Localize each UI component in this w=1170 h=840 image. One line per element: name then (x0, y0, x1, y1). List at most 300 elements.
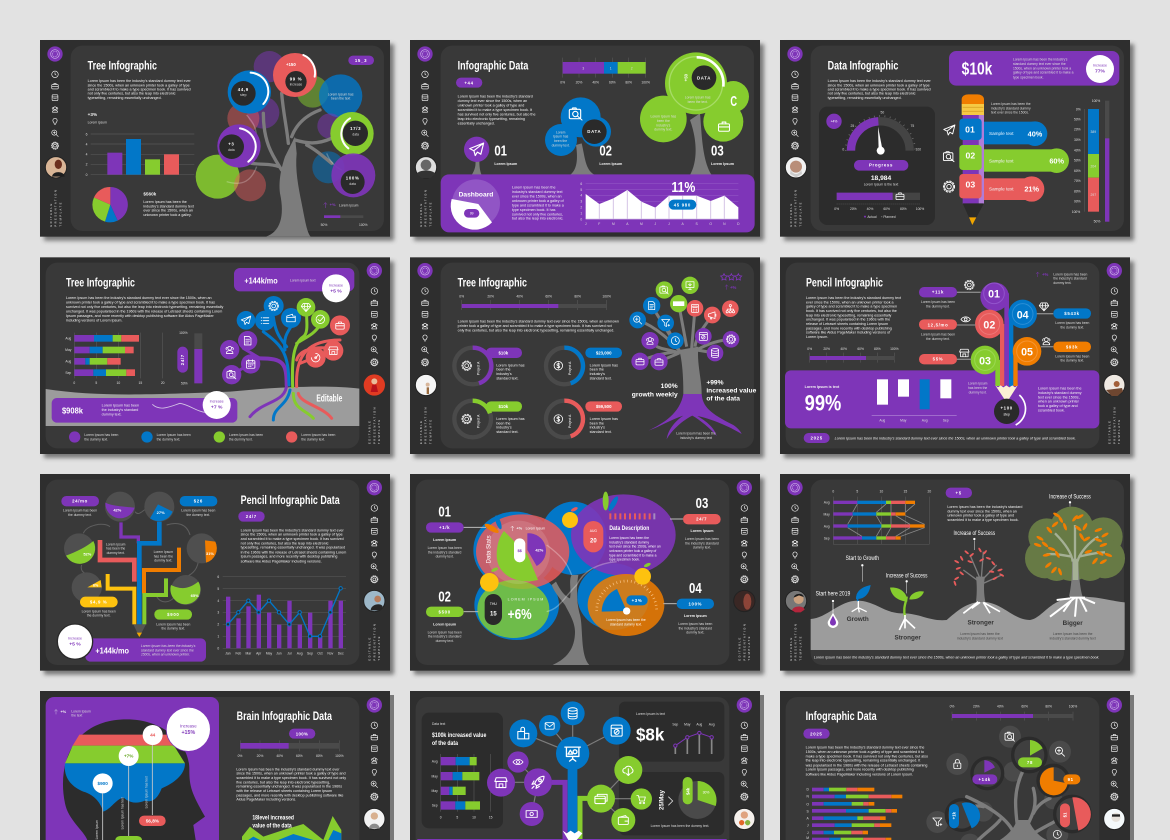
area chart: 4 (580, 194, 582, 198)
tree 02: 02 (599, 144, 612, 160)
paragraph: with the release of Letraset sheets containing Lorem Ipsum (236, 789, 332, 793)
top panel $10k: $10k (962, 59, 993, 79)
node icons (960, 280, 1050, 357)
area chart: N (723, 222, 726, 226)
green canopy (477, 580, 549, 638)
pie: purple (972, 758, 1003, 789)
dashboard text: Lorem Ipsum has been the (512, 186, 555, 190)
area chart: 3 (580, 200, 582, 204)
green canopy content: LOREM IPSUM (508, 598, 544, 602)
paragraph: make a type specimen book. It has survived not only five centuries, but also (806, 754, 928, 758)
gauge panel: +4% (831, 120, 837, 124)
paragraph: Lorem Ipsum has been the industry's standard dummy text ever (241, 528, 345, 532)
top panel $10k: 1500s, when an unknown printer took a (1013, 66, 1071, 70)
callout 01: 01 (438, 505, 451, 521)
rail label: PRESENTATION (1112, 406, 1116, 444)
growth note (1036, 272, 1088, 285)
pill 24/mo: Lorem Ipsum has been (63, 509, 97, 513)
blue connectors (523, 713, 617, 753)
progress bar: 0% (950, 705, 954, 709)
increase badge (166, 707, 210, 751)
paragraph: was popularised in the 1960s with the release of Letraset sheets containing (806, 763, 927, 767)
bottom panel $908k: dummy text. (102, 412, 122, 416)
project donut blue: been the (590, 368, 604, 372)
paragraph: and scrambled it to make a type specimen book. It has survived (828, 88, 931, 92)
combo chart: Dec (338, 651, 344, 655)
slide 9: growth stages (780, 474, 1134, 675)
rail label: PRESENTATION (794, 189, 798, 227)
area chart: 2 (580, 206, 582, 210)
gauge panel: 25 (850, 124, 854, 128)
rail label: TEMPLATE (798, 635, 802, 661)
paragraph (806, 745, 928, 776)
pie: green (1013, 738, 1046, 772)
legend: Lorem Ipsum has been (229, 433, 263, 437)
rail label (1108, 406, 1121, 444)
callout 01: +1/k (439, 525, 450, 530)
dashboard gauge: Dashboard (459, 191, 493, 198)
pencil pipes (100, 522, 179, 624)
pill $26: the dummy text. (186, 513, 210, 517)
tree 03: Lorem Ipsum has (685, 96, 711, 100)
pill $26: Lorem Ipsum has been (181, 509, 215, 513)
vertical stacked bar: 40% (1074, 148, 1081, 152)
top right panel: Aug (709, 723, 715, 727)
stacked bar chart: 15 (138, 381, 142, 385)
blue tree icons (629, 297, 684, 349)
head silhouette (63, 719, 205, 840)
combo chart: Mar (245, 651, 252, 655)
vertical progress (179, 331, 202, 386)
project donut green (454, 401, 525, 437)
circle 44 (143, 725, 163, 745)
mini progress bar: 100% (359, 223, 368, 227)
paragraph: and scrambled it to make a type specimen book. It has survived (88, 88, 191, 92)
stacked bar: 80% (625, 81, 632, 85)
pie: green: 78 (1027, 760, 1033, 765)
left data panel: May (432, 789, 438, 793)
paragraph: Lorem Ipsum passages, and more recently with desktop publishing (806, 768, 914, 772)
leader lines (95, 745, 152, 840)
combo chart: 3 (217, 611, 219, 615)
avatar: woman with fruit (734, 808, 755, 830)
paragraph: the leap into electronic typesetting, remaining essentially unchanged. It (806, 759, 920, 763)
pencil text: text ever since the 1500s. (991, 111, 1029, 115)
top panel $10k: type specimen book. (1013, 75, 1044, 79)
avatar: woman in red (364, 374, 385, 396)
bar chart: 2 (86, 163, 88, 167)
slide 2: Infographic Data (410, 40, 764, 241)
ribbon 03: 03 (966, 180, 975, 190)
rail label: PRESENTATION (424, 189, 428, 227)
stacked bar: 20% (576, 81, 582, 85)
stat +3%: +3% (88, 112, 98, 117)
stage: big tree: Bigger (1063, 620, 1083, 627)
project donut purple (454, 348, 525, 384)
tree 03: Lorem Ipsum (711, 162, 735, 166)
pill yellow: $4,9 % (90, 599, 107, 604)
slide 1: Tree Infographic (40, 40, 394, 241)
callout 03: 24/7 (696, 517, 707, 522)
ring: red 99% (273, 53, 317, 97)
tree 03: Lorem Ipsum has (650, 115, 677, 119)
green canopy content: THU (490, 602, 497, 606)
area chart: J (668, 222, 670, 226)
stacked bar chart: May (65, 348, 72, 352)
rail label: PRESENTATION (424, 406, 428, 444)
navigation rail (367, 480, 382, 583)
rail label (49, 189, 62, 227)
rail label: TEMPLATE (377, 635, 381, 661)
ring: purple 100%: 100% (346, 176, 360, 181)
paragraph: Lorem Ipsum has been the industry's standard (458, 94, 533, 98)
stage: red tree: industry's standard dummy text (957, 636, 1003, 640)
panel caption right: industry's standard dummy (1038, 391, 1082, 395)
left pills: Lorem Ipsum has been (921, 300, 955, 304)
panel caption left (968, 382, 988, 394)
paragraph: and scrambled it to make a type specimen book. It has survived (241, 537, 344, 541)
avatar: businesswoman (364, 808, 385, 830)
combo chart: 2 (217, 623, 219, 627)
mini progress bar (321, 215, 368, 227)
purple canopy content (583, 513, 661, 562)
paragraph: Lorem Ipsum. (806, 335, 828, 339)
project donut purple: Lorem Ipsum has (496, 363, 525, 367)
avatar: woman (45, 157, 67, 178)
paragraph: dummy text ever since the 1500s, when an (458, 99, 527, 103)
hanging bar chart: Sep (943, 418, 949, 422)
rail label: PRESENTATION (372, 623, 376, 661)
bottom panel $908k: +7 % (211, 405, 223, 411)
pill 24/7: 24/7 (246, 514, 257, 519)
pill 45 980: 45 980 (674, 202, 691, 207)
gauge in orange canopy: +3% (632, 598, 642, 603)
circle +7% (119, 746, 139, 766)
growth note: Lorem Ipsum (71, 709, 91, 713)
dashboard text: unknown printer took a galley of (512, 199, 565, 203)
chart heading: 18level increased (252, 815, 294, 821)
gauge panel: 18,984 (871, 175, 891, 182)
callout 04: dummy text. (686, 631, 704, 635)
tree stat left: growth weekly (632, 391, 678, 398)
callout 04: the industry's standard (679, 626, 712, 630)
pencil text: Lorem Ipsum has been the (991, 102, 1031, 106)
rail label: EDITABLE (1108, 420, 1112, 444)
progress bar: 0% (238, 754, 242, 758)
callout 02: dummy text. (436, 639, 454, 643)
purple head panel (46, 697, 219, 840)
rail label: TEMPLATE (428, 418, 432, 444)
slide 7: Pencil Infographic Data (40, 474, 394, 675)
tree (965, 770, 1068, 840)
pie caption: ever since the 1500s, when an (143, 209, 193, 213)
purple canopy content: text ever since the 1500s, when an (609, 545, 661, 549)
stage: sprout: Growth (847, 616, 869, 623)
ribbon 02 (959, 145, 1069, 173)
pill 15_3: 15_3 (355, 58, 367, 63)
rail label: EDITABLE (789, 202, 793, 227)
paragraph: scrambled it to make a type specimen book. It (458, 108, 532, 112)
pie: yellow (72, 572, 102, 602)
pill green: $900 (167, 612, 179, 617)
panel caption right: when an unknown printer (1038, 400, 1080, 404)
stage: seed: Start here 2019 (816, 592, 851, 598)
pill green (154, 609, 192, 631)
top panel +144k/mo: Lorem ipsum text (290, 278, 316, 282)
tree 03: +50 (683, 73, 688, 81)
ring: blue 44,9: 44,9 (238, 87, 249, 92)
project donut red: been the (590, 421, 604, 425)
paragraph: since the 1500s, when an unknown printer took a galley of type (88, 83, 190, 87)
project donut green: Project A (476, 414, 480, 428)
circle $900 (93, 773, 113, 793)
bar chart: 4 (86, 153, 88, 157)
blue stem (568, 767, 577, 840)
title: Brain Infographic Data (237, 709, 332, 723)
tree 03: been the text. (688, 100, 708, 104)
pipe captions: Lorem Ipsum (106, 542, 126, 546)
tree trunk and branches (638, 304, 731, 394)
title: Pencil Infographic (806, 276, 883, 290)
tree trunk (227, 93, 342, 237)
hanging bar chart: Aug (879, 418, 885, 422)
pie in red canopy: Data Stats (487, 535, 493, 563)
area chart (580, 182, 740, 226)
callout 04: 04 (689, 581, 702, 597)
paragraph (458, 94, 536, 125)
project donut red: industry's (590, 426, 605, 430)
combo chart: Nov (327, 651, 334, 655)
purple canopy content: 20 (590, 539, 597, 545)
paragraph: leap into electronic typesetting, remaining essentially (806, 313, 892, 317)
ribbon 01: 01 (965, 124, 975, 134)
stage: red tree: Increase of Success (953, 531, 995, 537)
callout 02 (426, 589, 478, 643)
project donut purple: industry's (496, 372, 512, 376)
purple panel (785, 370, 1099, 428)
progress bar: 80% (574, 295, 581, 299)
paragraph: software like Aldus PageMaker including versions of Lorem Ipsum. (806, 772, 913, 776)
paragraph: Lorem Ipsum has been the industry's standard dummy text ever (828, 79, 932, 83)
pill green: the dummy text. (161, 627, 185, 631)
ring: red 99%: increase (290, 83, 302, 87)
circle $900: $900 (97, 781, 108, 786)
pill green (115, 836, 142, 840)
paragraph: including versions of Lorem Ipsum. (66, 318, 122, 322)
vertical stacked bar: 50% (1074, 159, 1081, 163)
purple canopy (571, 494, 676, 576)
tree 02: DATA (587, 129, 602, 134)
paragraph (947, 505, 1022, 522)
rail label: TEMPLATE (58, 201, 62, 227)
purple icons (220, 331, 260, 384)
progress bar: 20% (973, 705, 980, 709)
stage: red tree: Stronger (967, 619, 994, 626)
pill 2025 (803, 729, 830, 739)
chart heading (252, 815, 294, 829)
increase badge: +15% (181, 730, 195, 736)
progress bar: 100% (602, 295, 611, 299)
vertical stacked bar (1072, 107, 1099, 214)
ring: purple 100% (331, 153, 375, 197)
left data panel: 5 (456, 816, 458, 820)
slide 5: Tree Infographic with projects (410, 257, 764, 458)
tree trunk (552, 575, 589, 665)
paragraph: since the 1500s, when an unknown printer took a galley of type (828, 83, 930, 87)
tree 02 (545, 97, 623, 175)
callout 01 (426, 505, 486, 559)
left pills: the dummy text. (926, 337, 950, 341)
panel caption right: Lorem Ipsum has been the (1038, 387, 1081, 391)
floating icons (933, 732, 1064, 838)
top panel $10k: 77% (1095, 69, 1106, 75)
rail label: EDITABLE (419, 420, 423, 444)
vertical progress: 100% (1092, 99, 1100, 103)
ribbon 01: 40% (1028, 129, 1043, 138)
callout 03: 03 (696, 496, 708, 512)
stacked bar chart: O (806, 802, 809, 806)
combo chart: 5 (217, 587, 219, 591)
pie: orange (1038, 765, 1080, 796)
progress bar: 20% (823, 347, 830, 351)
root caption: Lorem Ipsum has been the (676, 431, 716, 435)
tree 01 (464, 137, 518, 175)
ground (46, 387, 359, 426)
bottom panel $908k: $908k (62, 405, 83, 415)
purple canopy content: AUG (590, 529, 597, 533)
pie: blue (144, 492, 174, 522)
project donut red (546, 401, 622, 437)
area chart: D (737, 222, 740, 226)
purple canopy content: Data Description (609, 525, 649, 532)
paragraph: Lorem Ipsum has been the industry's standard dummy text ever (236, 767, 340, 771)
ribbon 01 (959, 119, 1047, 146)
paragraph (66, 296, 223, 322)
dashboard panel (441, 174, 755, 232)
node 03 (971, 346, 999, 374)
navigation rail (417, 263, 433, 366)
tree 03 (640, 52, 749, 175)
orange canopy (588, 574, 664, 636)
area chart: F (598, 222, 600, 226)
callout 02: the industry's standard (428, 635, 462, 639)
tree 03: C (730, 94, 737, 110)
gauge panel: 100 (916, 148, 921, 152)
ring: red 99%: +150 (286, 62, 296, 67)
growth indicator: +% (730, 285, 737, 290)
navigation rail (737, 480, 752, 583)
paragraph: unknown printer took a galley of type and (458, 104, 524, 108)
node 02: 02 (983, 319, 995, 331)
panel caption right: scrambled book. (1038, 408, 1065, 412)
project donut purple: standard text. (496, 376, 518, 380)
right pills: Lorem Ipsum has been (1055, 354, 1089, 358)
combo chart: Jan (225, 651, 231, 655)
99% stat: Lorem Ipsum is text (805, 385, 840, 389)
legend: Lorem Ipsum has been (301, 433, 336, 437)
paragraph: since the 1500s, when an unknown printer took a galley of type (241, 533, 343, 537)
ribbon 03 (959, 174, 1044, 202)
area chart: 6 (580, 182, 582, 186)
left pills: 55% (933, 357, 943, 362)
stacked bar chart (806, 788, 902, 840)
pipe captions (106, 542, 173, 563)
pill 24/mo: 24/mo (72, 499, 88, 504)
side icons (943, 125, 955, 192)
root caption: industry's dummy text (680, 436, 712, 440)
combo chart: 0 (217, 647, 219, 651)
legend: Lorem Ipsum has been (157, 433, 191, 437)
ribbon 03: 21% (1024, 185, 1039, 194)
vertical stacked bar: 60% (1074, 169, 1081, 173)
growth indicator (324, 202, 359, 208)
stage: big tree: industry's standard dummy text (1050, 636, 1096, 640)
growth note: the industry's standard (1053, 277, 1087, 281)
callout 01: dummy text. (436, 555, 454, 559)
project donut red: $59,500 (596, 404, 612, 409)
pie: blue (946, 800, 980, 830)
paragraph: Ipsum passages, and more recently with desktop publishing software like Aldus PageMaker (66, 314, 215, 318)
left pills: Lorem Ipsum has been (921, 333, 955, 337)
pill 100% (289, 729, 315, 739)
slide 3: Data Infographic (780, 40, 1134, 241)
top panel $10k: standard dummy text ever since the (1013, 62, 1066, 66)
vertical stacked bar: 0% (1076, 107, 1081, 111)
vertical stacked bar: 50% (1074, 118, 1081, 122)
paragraph: ever since the 1500s, when an unknown printer took a (806, 300, 895, 304)
paragraph: unknown printer took a galley of type and scrambled it to make a type specimen book. It has (66, 300, 215, 304)
rail label (419, 406, 432, 444)
callout 02: $500 (439, 609, 451, 614)
paragraph (828, 79, 932, 100)
navigation rail (787, 46, 803, 149)
paragraph: not only five centuries, but also the leap into electronic (241, 541, 329, 545)
circle +7%: +7% (124, 754, 134, 759)
navigation rail (367, 697, 382, 800)
paragraph: scrambled it to make a type specimen book. It has survived not only (236, 776, 346, 780)
vertical progress: 50% (181, 382, 188, 386)
vertical stacked bar: 80% (1074, 189, 1081, 193)
ring: green 17/3: 17/3 (350, 126, 361, 131)
stacked bar chart: 10 (116, 381, 120, 385)
rail label (419, 189, 432, 227)
title: Tree Infographic (66, 276, 135, 290)
tree 01: Lorem Ipsum (494, 162, 518, 166)
area chart: 5 (580, 188, 582, 192)
dashboard text: type and scrambled it to make a (512, 203, 565, 207)
right pills: $93k (1066, 344, 1078, 349)
stacked bar: 40% (592, 81, 599, 85)
left data panel: $100k increased value (432, 733, 487, 739)
node 01: 01 (988, 289, 1000, 301)
panel caption right (1038, 387, 1082, 412)
stacked bar chart: N (806, 795, 809, 799)
avatar: figure on white (415, 374, 437, 396)
rail label: EDITABLE (368, 420, 372, 444)
project donut blue (546, 348, 622, 384)
mini progress bar: 50% (321, 223, 327, 227)
top right panel: May (684, 723, 691, 727)
slide 12: Infographic Data tree (780, 691, 1134, 840)
project donut blue: $23,000 (596, 350, 612, 355)
hanging bar chart (872, 379, 957, 422)
pie: blue: 27% (157, 510, 165, 515)
paragraph: Lorem Ipsum has been the industry's standard dummy text ever (88, 79, 192, 83)
gauge in orange canopy (597, 581, 657, 626)
stage: big tree: Lorem Ipsum has been the (1053, 632, 1093, 636)
chart heading: value of the data (252, 823, 292, 829)
bottom panel: standard dummy text ever since the (141, 648, 194, 652)
